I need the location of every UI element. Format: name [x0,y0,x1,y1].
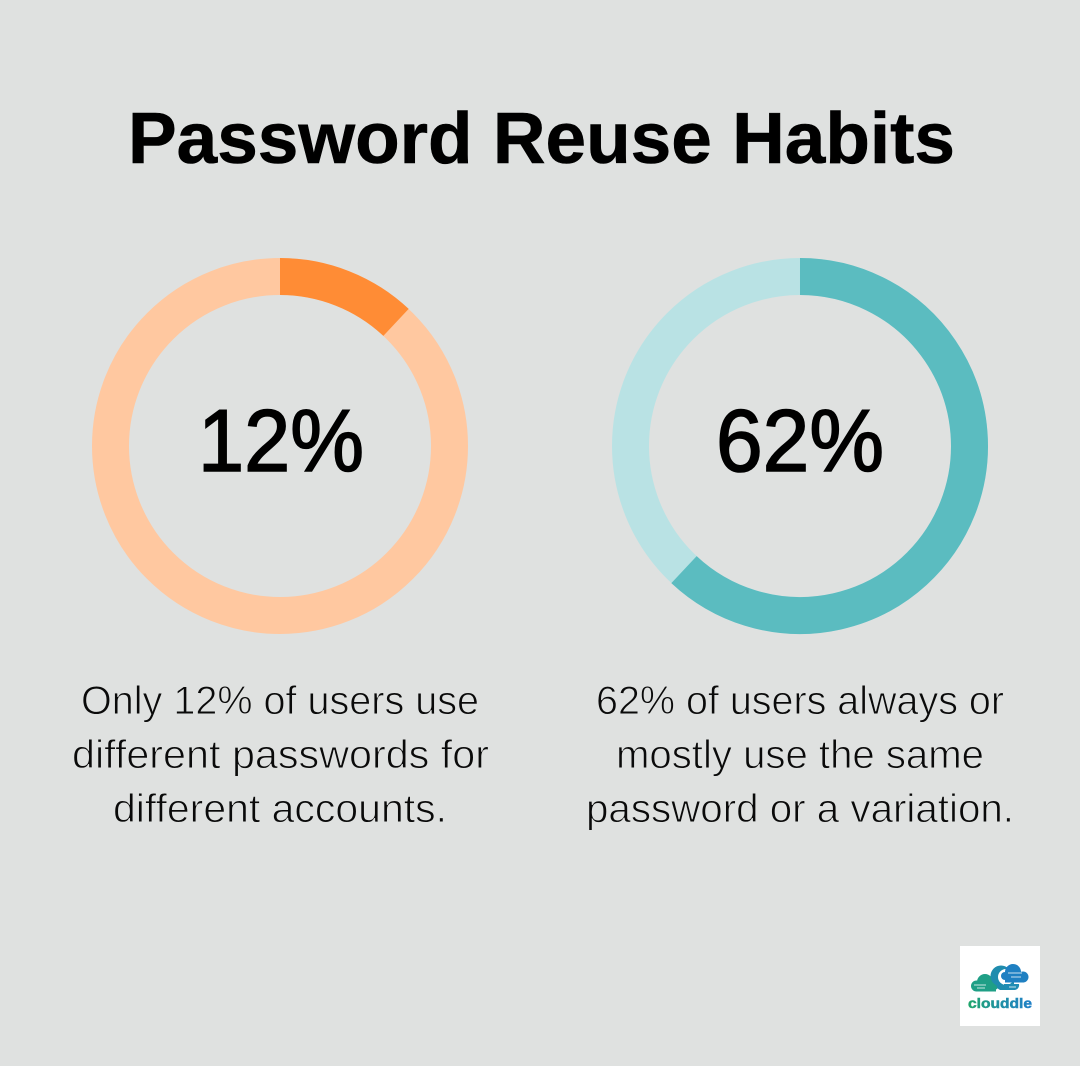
logo: clouddle [960,946,1040,1026]
description: 62%: password or a variation. [586,787,1014,831]
description: 12% [72,679,489,831]
description: 12%: different passwords for [72,733,489,777]
value: 12%: 12% [198,391,364,490]
wordmark: clouddle [968,995,1032,1011]
value: 62%: 62% [716,391,884,490]
description: 12%: different accounts. [113,787,447,831]
title: Password Reuse Habits [128,99,955,179]
donut chart: 62% [630,276,970,616]
panel: 62% stat [586,276,1014,831]
icon: clouds [971,964,1028,992]
description: 62%: mostly use the same [616,733,984,777]
donut chart: 12% [110,276,450,616]
description: 62% [586,679,1014,831]
panel: 12% stat [72,276,489,831]
description: 12%: Only 12% of users use [81,679,479,723]
description: 62%: 62% of users always or [596,679,1004,723]
